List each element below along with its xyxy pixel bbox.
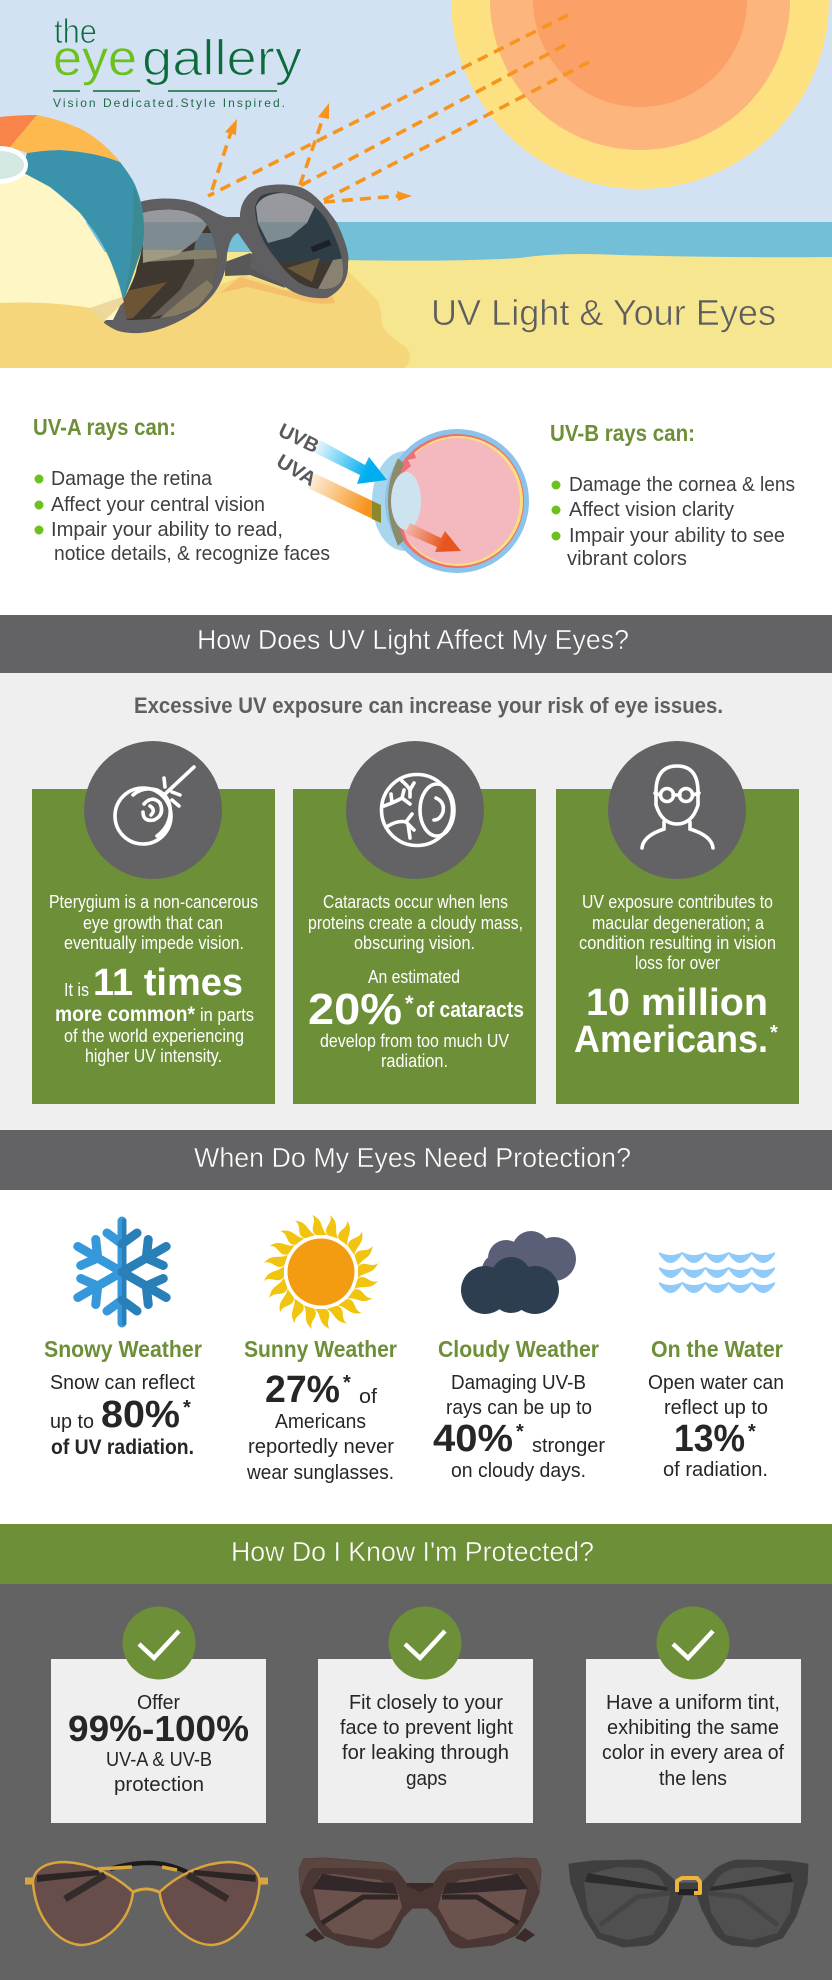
list: UV-B: Damage the cornea & lens: [569, 474, 795, 496]
text: pterygium: eventually impede vision.: [64, 933, 244, 953]
section bar: How Do I Know I'm Protected?: [0, 1524, 832, 1584]
text: cataracts: proteins create a cloudy mass,: [308, 913, 523, 933]
icon: snowflake: [70, 1221, 174, 1323]
text: offer: protection: [114, 1774, 204, 1796]
ball teal panel: [22, 150, 144, 300]
heading: UV-A: UV-A rays can:: [33, 414, 176, 440]
UVB arrow: [313, 440, 387, 484]
text: sunny: [246, 1369, 394, 1484]
text: macular degeneration: loss for over: [635, 953, 720, 973]
text: tint: color in every area of: [602, 1742, 784, 1764]
icon: clouds: [461, 1231, 576, 1314]
text: tint: [602, 1692, 784, 1790]
sunglasses frame: [103, 184, 348, 333]
text: fit: face to prevent light: [340, 1717, 513, 1739]
red arrow: [405, 523, 461, 552]
text: water: [648, 1372, 784, 1481]
sunglasses: [103, 184, 350, 333]
text: fit: gaps: [406, 1768, 447, 1790]
sand pile by ball: [0, 302, 101, 320]
card: tint: [586, 1606, 801, 1823]
icon: check 3: [656, 1606, 730, 1680]
text: offer: 99%-100%: [68, 1708, 249, 1749]
text: sunny: of: [359, 1386, 377, 1408]
text: macular degeneration: Americans.: [574, 1019, 768, 1061]
text: pterygium: of the world experiencing: [64, 1026, 244, 1046]
text: water: 13%: [674, 1418, 745, 1460]
text: cloudy: [433, 1372, 605, 1482]
text: cataracts: radiation.: [381, 1051, 448, 1071]
text: offer: Offer: [137, 1692, 180, 1714]
list: UV-A: Damage the retina: [51, 468, 213, 490]
label: UVB: UVB: [275, 420, 322, 458]
text: water: Open water can: [648, 1372, 784, 1394]
bullets: UV-A: [34, 474, 44, 534]
eyeball: [385, 429, 529, 573]
card: pterygium: [32, 741, 275, 1104]
sky: [0, 0, 832, 222]
heading: UV-B: UV-B rays can:: [550, 420, 695, 446]
section bar: When Do My Eyes Need Protection?: [0, 1130, 832, 1190]
diagram: eye with UV rays: [272, 420, 529, 573]
text: pterygium: [49, 892, 258, 1066]
text: cloudy: *: [516, 1421, 524, 1443]
right lens: [255, 192, 344, 289]
text: sunny: *: [343, 1372, 351, 1394]
card: fit: [318, 1606, 533, 1823]
label: UVA: UVA: [272, 450, 320, 491]
text: snowy: 80%: [101, 1394, 180, 1436]
text: cataracts: obscuring vision.: [354, 933, 475, 953]
text: fit: [340, 1692, 513, 1790]
text: cloudy: rays can be up to: [446, 1397, 592, 1419]
icon: check 2: [388, 1606, 462, 1680]
text: pterygium: eye growth that can: [83, 913, 223, 933]
text: water: of radiation.: [663, 1459, 768, 1481]
text: cloudy: on cloudy days.: [451, 1460, 586, 1482]
text: pterygium: It is: [64, 980, 89, 1000]
text: pterygium: 11 times: [93, 962, 243, 1004]
panel: cloudy weather: [433, 1231, 605, 1482]
icon: cataract eye: [382, 774, 454, 846]
text: cataracts: Cataracts occur when lens: [323, 892, 508, 912]
text: cataracts: [308, 892, 524, 1071]
text: fit: Fit closely to your: [349, 1692, 503, 1714]
beach ball: [0, 115, 144, 322]
text: cataracts: *: [405, 991, 414, 1016]
text: snowy: up to: [50, 1411, 94, 1433]
icon: waves: [659, 1252, 775, 1293]
text: macular degeneration: macular degeneration; a: [592, 913, 765, 933]
list: UV-A: notice details, & recognize faces: [54, 543, 330, 565]
text: snowy: *: [183, 1397, 191, 1419]
heading: water: On the Water: [651, 1336, 783, 1362]
list: UV-B: Impair your ability to see: [569, 525, 785, 547]
logo: Vision Dedicated.Style Inspired.: [53, 96, 285, 110]
sunglasses arm: [225, 253, 285, 288]
text: snowy: Snow can reflect: [50, 1372, 195, 1394]
sand: [105, 252, 832, 368]
heading: snowy: Snowy Weather: [44, 1336, 202, 1362]
sun: [451, 0, 829, 189]
panel: protection section background: [0, 1584, 832, 1980]
panel: eye issues section: [0, 673, 832, 1130]
text: water: reflect up to: [664, 1397, 768, 1419]
iris: [388, 458, 404, 546]
ball teal edge: [123, 186, 144, 300]
section bar: How Does UV Light Affect My Eyes?: How Does UV Light Affect My Eyes?: [197, 624, 629, 655]
ball orange panel: [0, 115, 37, 147]
illustration: brown oversized sunglasses: [299, 1858, 541, 1947]
panel: UV-A rays: [33, 414, 330, 565]
text: water: *: [748, 1421, 756, 1443]
logo: eye: [53, 30, 137, 86]
panel: beach header illustration: [0, 0, 832, 368]
list: UV-A: Impair your ability to read,: [51, 519, 283, 541]
text: cataracts: develop from too much UV: [320, 1031, 509, 1051]
title: UV Light & Your Eyes: [431, 292, 776, 333]
icon: sun: [264, 1215, 378, 1329]
heading: cloudy: Cloudy Weather: [438, 1336, 599, 1362]
inner red tissue: [400, 448, 424, 560]
text: macular degeneration: condition resulting in vision: [579, 933, 776, 953]
text: pterygium: more common*: [55, 1003, 196, 1026]
text: macular degeneration: [574, 892, 778, 1061]
bullets: UV-B: [552, 480, 560, 540]
text: tint: the lens: [659, 1768, 727, 1790]
text: offer: UV-A & UV-B: [106, 1749, 212, 1771]
logo: the: [54, 13, 97, 51]
text: cloudy: 40%: [433, 1418, 513, 1460]
text: cataracts: 20%: [308, 985, 402, 1034]
text: pterygium: in parts: [200, 1005, 254, 1025]
section bar: When Do My Eyes Need Protection?: When Do My Eyes Need Protection?: [194, 1142, 631, 1173]
lens: [391, 472, 421, 530]
text: cataracts: of cataracts: [416, 997, 524, 1022]
ball tan shadow: [90, 297, 124, 322]
text: cataracts: An estimated: [368, 967, 460, 987]
text: sunny: reportedly never: [248, 1436, 394, 1458]
section bar: How Do I Know I'm Protected?: How Do I Know I'm Protected?: [231, 1536, 594, 1567]
cornea: [372, 451, 438, 551]
text: macular degeneration: *: [770, 1022, 778, 1044]
panel: snowy weather: [44, 1221, 202, 1459]
card: UV protection: [51, 1606, 266, 1823]
list: UV-B: Affect vision clarity: [569, 499, 734, 521]
text: tint: exhibiting the same: [607, 1717, 779, 1739]
sea: [86, 222, 832, 261]
icon: head with glasses: [642, 766, 713, 848]
icon: check 1: [122, 1606, 196, 1680]
text: pterygium: higher UV intensity.: [85, 1046, 222, 1066]
icon: pterygium eye: [115, 767, 194, 844]
text: tint: Have a uniform tint,: [606, 1692, 780, 1714]
panel: sunny weather: [244, 1215, 397, 1484]
left lens: [123, 210, 218, 320]
text: macular degeneration: UV exposure contributes to: [582, 892, 773, 912]
panel: on the water: [648, 1252, 784, 1481]
list: UV-B: [567, 474, 795, 570]
ball yellow panel: [10, 115, 120, 162]
list: UV-A: Affect your central vision: [51, 494, 265, 516]
card: cataracts: [293, 741, 536, 1104]
text: fit: for leaking through: [342, 1742, 509, 1764]
text: snowy: [50, 1372, 195, 1459]
logo: [53, 13, 302, 110]
illustration: black sunglasses with gold buckle: [570, 1861, 807, 1946]
illustration: gold aviator sunglasses: [25, 1862, 268, 1945]
panel: UV-B rays: [550, 420, 795, 570]
reflected arrowheads: [225, 103, 412, 201]
section bar: How Does UV Light Affect My Eyes?: [0, 615, 832, 673]
card: macular degeneration: [556, 741, 799, 1104]
sand mound: [103, 271, 410, 368]
text: pterygium: Pterygium is a non-cancerous: [49, 892, 258, 912]
text: snowy: of UV radiation.: [51, 1436, 194, 1459]
text: sunny: Americans: [275, 1411, 366, 1433]
text: macular degeneration: 10 million: [586, 982, 768, 1024]
UVA arrow: [308, 472, 381, 523]
subheading: Excessive UV exposure can increase your risk of eye issues.: [134, 693, 723, 718]
logo: gallery: [142, 30, 302, 86]
text: cloudy: Damaging UV-B: [451, 1372, 586, 1394]
list: UV-B: vibrant colors: [567, 548, 687, 570]
heading: sunny: Sunny Weather: [244, 1336, 397, 1362]
text: offer: [68, 1692, 249, 1796]
ball cream panel: [0, 172, 123, 320]
light rays arrows: [208, 15, 589, 202]
list: UV-A: [51, 468, 330, 565]
ball valve: [0, 146, 28, 184]
text: sunny: wear sunglasses.: [246, 1462, 394, 1484]
text: sunny: 27%: [265, 1369, 340, 1411]
text: cloudy: stronger: [532, 1435, 605, 1457]
glasses shadow: [220, 277, 335, 304]
